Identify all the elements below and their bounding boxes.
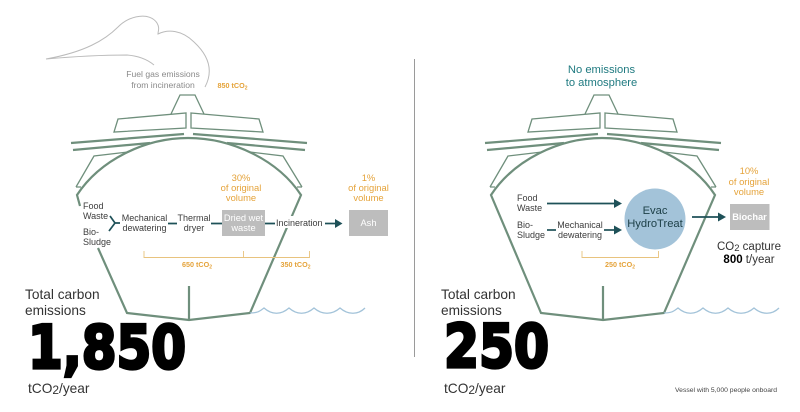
unit left: /year — [59, 381, 90, 396]
smoke label: Fuel gas emissions — [126, 69, 200, 79]
box: ash — [349, 210, 388, 236]
350 label: 350 tCO — [281, 260, 308, 269]
volume 10%: of original — [729, 176, 769, 187]
volume 30%: volume — [226, 192, 256, 203]
unit right: tCO — [444, 381, 468, 396]
box: dried wet waste — [222, 210, 265, 236]
box: biochar: Biochar — [732, 212, 767, 222]
mechanical dewatering: Mechanical — [557, 220, 603, 230]
footnote: Vessel with 5,000 people onboard — [675, 387, 777, 394]
volume 10%: 10% — [740, 165, 758, 176]
waves left — [250, 308, 365, 313]
thermal dryer step: dryer — [184, 223, 204, 233]
total heading left: emissions — [25, 303, 86, 318]
inputs: Food — [517, 193, 538, 203]
volume 1%: volume — [353, 192, 384, 203]
inputs: Bio- — [517, 220, 533, 230]
thermal dryer step: Thermal — [177, 213, 211, 223]
emissions bracket left — [144, 251, 310, 258]
unit right: /year — [475, 381, 506, 396]
arrow dewatering — [604, 226, 622, 234]
merge connector — [109, 216, 120, 231]
mechanical dewatering: dewatering — [558, 230, 602, 240]
unit left: 2 — [52, 383, 59, 397]
right panel: Evac HydroTreat process — [441, 64, 781, 397]
total heading right: emissions — [441, 303, 502, 318]
total heading left: Total carbon — [25, 287, 100, 302]
smoke label: from incineration — [131, 80, 195, 90]
unit left: tCO — [28, 381, 52, 396]
650 label: 650 tCO — [182, 260, 209, 269]
inputs: Waste — [83, 211, 108, 221]
volume 10%: volume — [734, 186, 764, 197]
box: biochar — [730, 204, 770, 230]
inputs: Waste — [517, 203, 542, 213]
divider — [414, 59, 416, 357]
Evac HydroTreat circle: HydroTreat — [627, 218, 684, 230]
smoke plume — [46, 16, 209, 87]
arrow to ash — [325, 219, 342, 228]
box: ash: Ash — [360, 218, 377, 228]
CO2 capture: 2 — [734, 243, 739, 254]
arrow food waste — [547, 199, 622, 208]
volume 1%: of original — [348, 182, 389, 193]
no emissions label: to atmosphere — [566, 77, 637, 89]
250 label: 2 — [632, 264, 635, 270]
ship right — [485, 95, 721, 320]
total value left: 1,850 — [28, 313, 186, 383]
connector sludge — [547, 229, 556, 231]
incineration stack emissions: 850 tCO — [218, 81, 245, 90]
box: dried wet waste: waste — [230, 223, 256, 233]
250 label: 250 tCO — [605, 260, 632, 269]
unit right: 2 — [468, 383, 475, 397]
CO2 capture: CO — [717, 241, 781, 254]
650 label: 2 — [209, 264, 212, 270]
box: dried wet waste: Dried wet — [224, 213, 264, 223]
Evac HydroTreat circle: Evac — [643, 205, 668, 217]
incineration step: Incineration — [276, 218, 323, 228]
volume 30%: 30% — [232, 172, 250, 183]
mechanical dewatering step: dewatering — [122, 223, 167, 233]
volume 30%: of original — [221, 182, 261, 193]
inputs: Sludge — [517, 230, 545, 240]
connector — [168, 222, 275, 224]
inputs: Sludge — [83, 237, 111, 247]
total heading right: Total carbon — [441, 287, 516, 302]
inputs: Food — [83, 201, 104, 211]
waves right — [664, 308, 779, 313]
arrow to biochar — [692, 212, 726, 222]
Evac HydroTreat circle — [624, 188, 686, 250]
emissions bracket right — [582, 251, 658, 258]
inputs: Bio- — [83, 227, 99, 237]
350 label: 2 — [308, 264, 311, 270]
CO2 capture: capture — [739, 241, 781, 253]
total value right: 250 — [444, 312, 549, 382]
mechanical dewatering step: Mechanical — [122, 213, 167, 223]
no emissions label: No emissions — [568, 64, 635, 76]
incineration stack emissions: 2 — [245, 86, 248, 92]
ship left — [71, 95, 307, 320]
volume 1%: 1% — [362, 172, 375, 183]
CO2 capture: 800 t/year — [723, 254, 775, 266]
left panel: incineration process — [25, 16, 389, 397]
